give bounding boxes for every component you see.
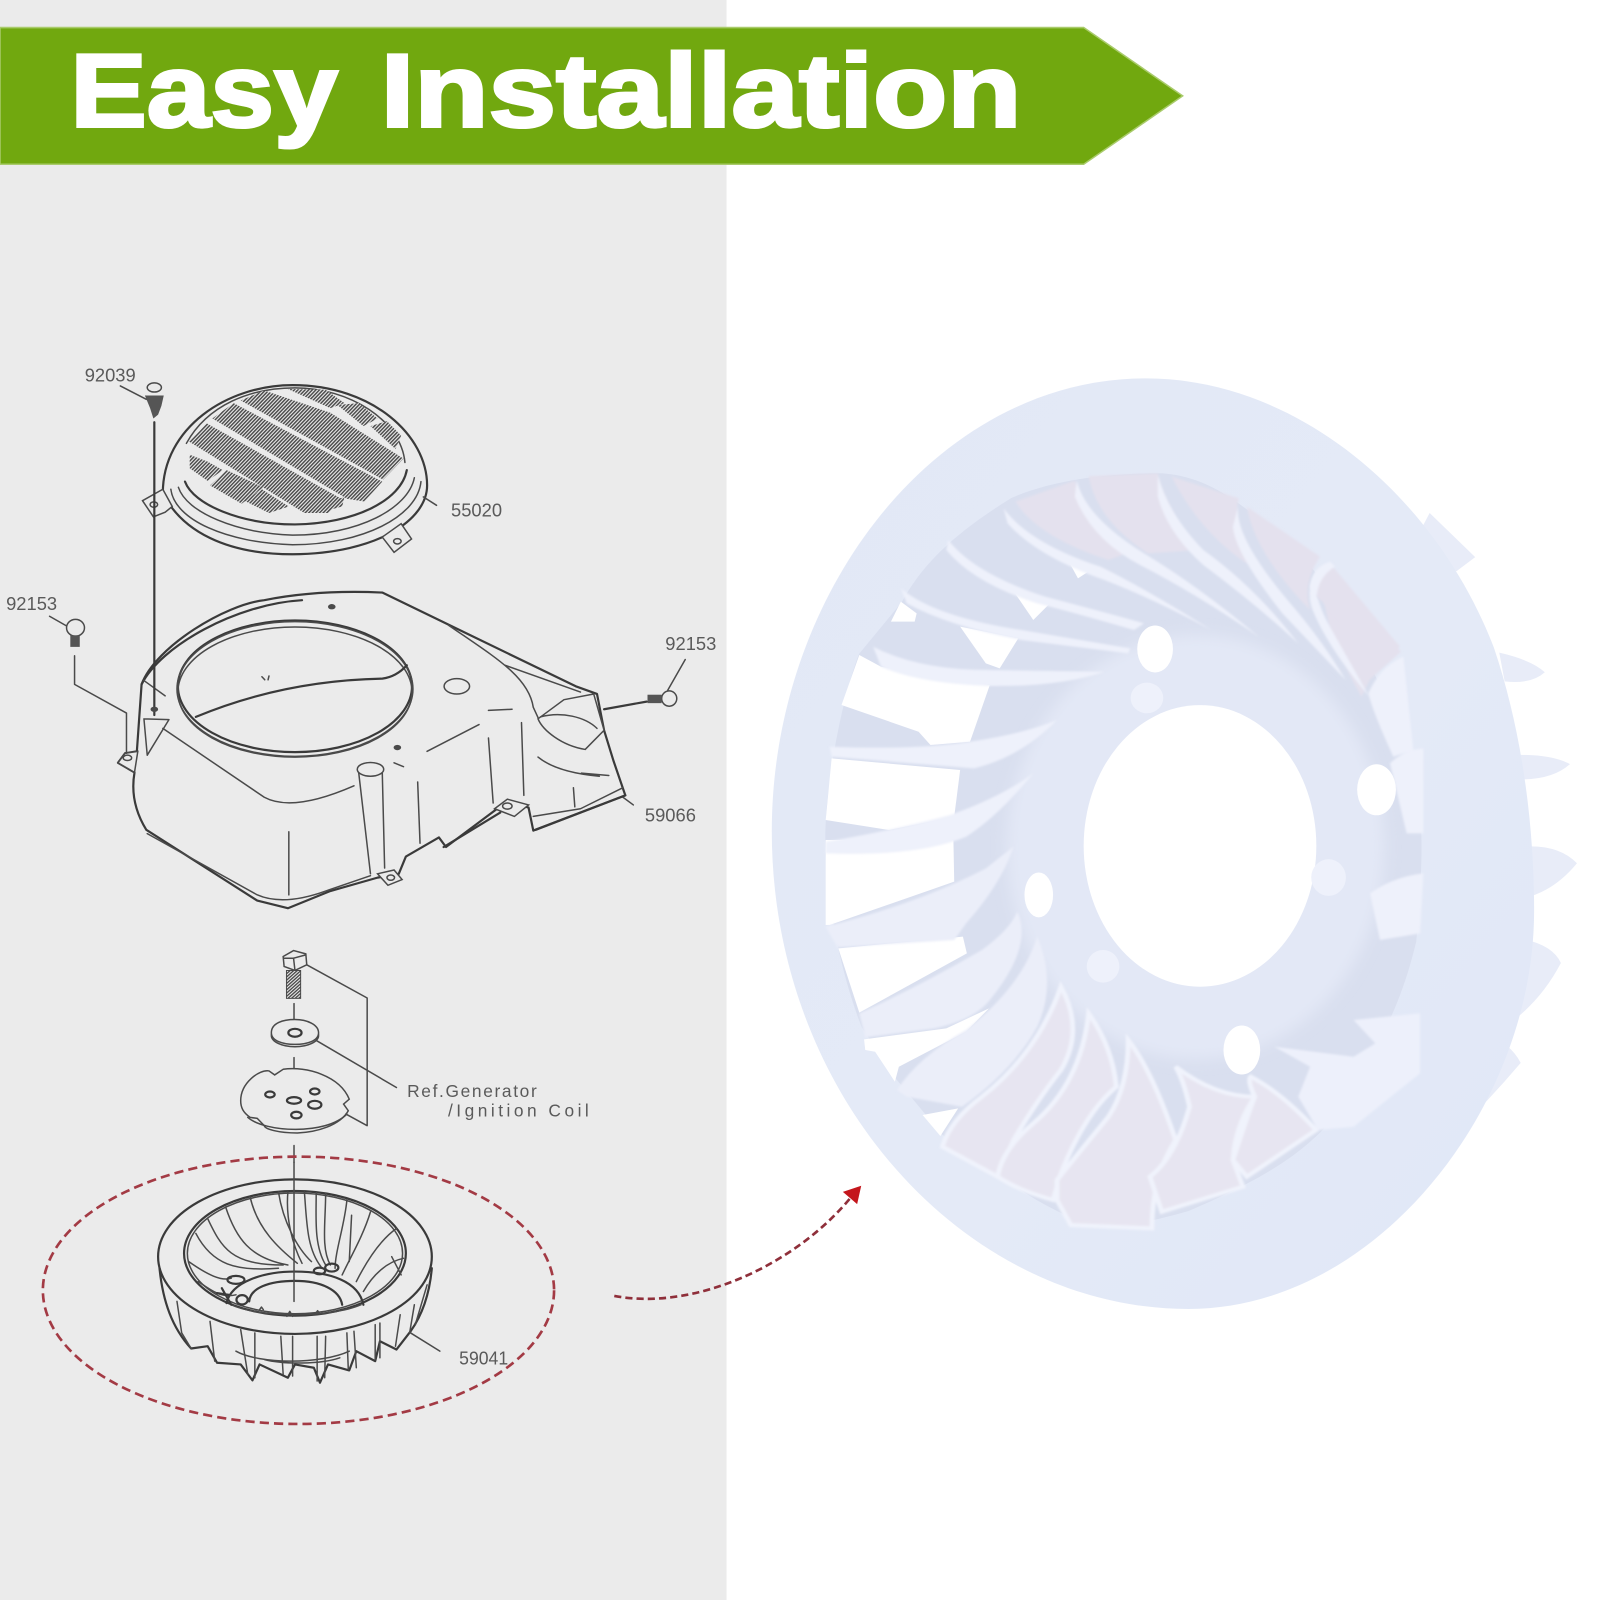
part number labels: 55020 xyxy=(451,499,502,520)
windows: see-through gaps upper xyxy=(826,562,1090,830)
ring with inner shadow fill xyxy=(772,378,1534,1309)
diagram: fan 59041 xyxy=(158,1162,440,1383)
diagram: grille cover 55020 xyxy=(143,385,437,554)
title: Installation xyxy=(381,34,1021,150)
center hole xyxy=(1084,705,1316,987)
part number labels xyxy=(6,365,716,1368)
bosses xyxy=(1087,683,1346,983)
title: Easy xyxy=(70,34,338,150)
part number labels: 92039 xyxy=(85,365,136,386)
diagram: bolt, washer and plate xyxy=(241,951,396,1162)
diagram: blower housing 59066 xyxy=(118,592,633,908)
hub disc xyxy=(1007,635,1385,1059)
part number labels: 59066 xyxy=(645,804,696,825)
product photo: white plastic cooling fan xyxy=(772,378,1577,1309)
part number labels: 59041 xyxy=(459,1347,508,1368)
part number labels: /Ignition Coil xyxy=(448,1100,589,1120)
dashed red arrow to product xyxy=(614,1186,861,1299)
upper blades xyxy=(826,473,1401,854)
windows: see-through gaps lower xyxy=(826,840,989,1136)
outer fins behind ring xyxy=(1392,513,1577,1217)
part number labels: Ref.Generator xyxy=(407,1081,537,1101)
panel: grey diagram background xyxy=(0,0,727,1600)
lower blades xyxy=(826,847,1420,1228)
right side blades and tabs xyxy=(1310,562,1423,940)
dashed red highlight ellipse xyxy=(43,1157,554,1424)
part number labels: 92153 xyxy=(665,633,716,654)
diagram: fasteners and leader lines xyxy=(50,383,685,753)
part number labels: 92153 xyxy=(6,593,57,614)
banner: green arrow xyxy=(0,28,1183,164)
title xyxy=(70,34,1021,150)
mounting holes xyxy=(1024,626,1396,1074)
